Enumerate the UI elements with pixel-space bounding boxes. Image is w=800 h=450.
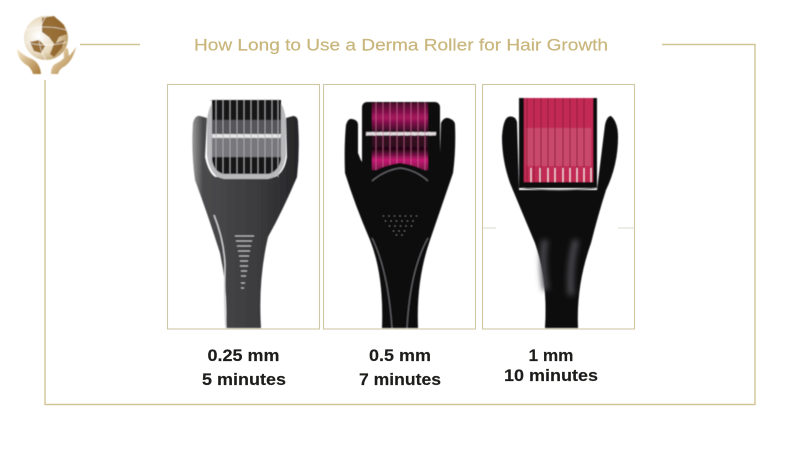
grip dots — [383, 216, 420, 235]
label: 0.5 mm, 7 minutes — [359, 346, 441, 389]
label: 1 mm, 10 minutes: 1 mm — [528, 346, 574, 365]
roller handle: black — [502, 116, 618, 328]
roller head: silver needles — [207, 99, 286, 179]
handle highlights — [372, 168, 428, 328]
label: 0.5 mm, 7 minutes: 7 minutes — [359, 370, 441, 389]
icon: right hand — [51, 47, 76, 74]
title: How Long to Use a Derma Roller for Hair Growth — [194, 36, 608, 54]
label: 0.5 mm, 7 minutes: 0.5 mm — [369, 346, 431, 365]
handle soft highlights — [543, 240, 576, 295]
roller head: red needles — [519, 98, 597, 188]
grip ridges — [235, 236, 254, 288]
label: 0.25 mm, 5 minutes: 0.25 mm — [208, 346, 280, 365]
panel: 1 mm roller — [482, 84, 634, 329]
roller handle: black — [345, 118, 455, 328]
panel: 0.25 mm roller — [168, 84, 320, 329]
label: 1 mm, 10 minutes — [504, 346, 598, 385]
label: 0.25 mm, 5 minutes: 5 minutes — [202, 370, 286, 389]
roller handle: grey — [192, 116, 299, 328]
label: 1 mm, 10 minutes: 10 minutes — [504, 366, 598, 385]
icon: globe — [24, 16, 68, 60]
label: 0.25 mm, 5 minutes — [202, 346, 286, 389]
panel: 0.5 mm roller — [324, 84, 476, 329]
handle highlight — [214, 215, 226, 328]
roller head: magenta needles — [362, 102, 440, 176]
head bottom crescent — [523, 188, 596, 190]
faint horizon marks — [483, 227, 634, 229]
icon: left hand — [17, 49, 41, 74]
logo: globe held by hands — [17, 16, 76, 74]
gold outline frame — [45, 44, 755, 404]
